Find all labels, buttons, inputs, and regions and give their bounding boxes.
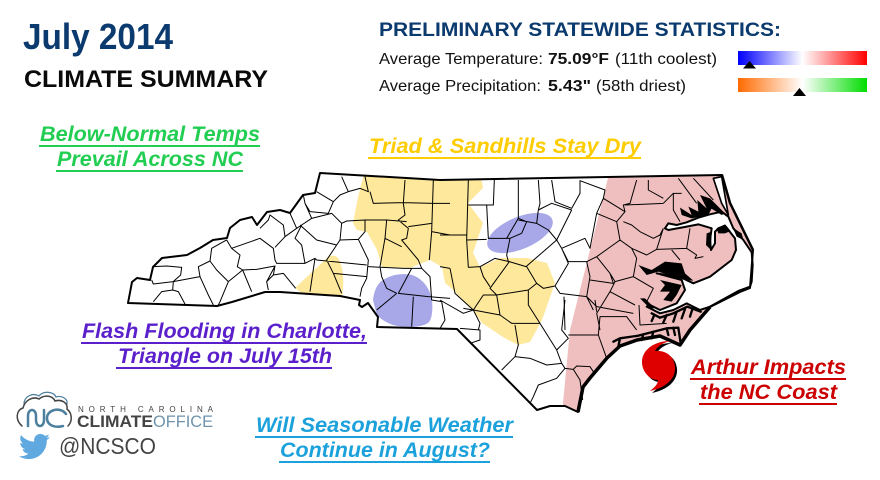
callout: below-normal temps: Prevail Across NC [57,148,244,171]
callout: seasonable weather: Will Seasonable Weather [256,414,515,437]
yellow dry area: Triad and Sandhills [353,170,555,345]
logo: North Carolina Climate Office [17,392,214,431]
stats heading: PRELIMINARY STATEWIDE STATISTICS: [379,20,781,41]
callout: Arthur [690,356,846,405]
precipitation statistic: Average Precipitation: [379,78,541,95]
precipitation statistic [379,78,686,95]
map: North Carolina counties [128,165,770,425]
sounds and inlets [613,177,753,347]
temperature rank bar [738,51,867,68]
temperature statistic: (11th coolest) [615,51,717,68]
panel: preliminary statewide statistics [379,20,867,96]
blue flash flood area: Triangle [487,212,553,254]
icon: hurricane Arthur [642,341,677,393]
Currituck sound water [713,177,728,215]
text: Twitter handle: @NCSCO [59,433,156,459]
region: below-normal temperature and dry shading [296,176,752,410]
subtitle: Climate Summary: CLIMATE SUMMARY [24,66,268,93]
text: Office: OFFICE [153,412,213,431]
callout: Arthur: Arthur Impacts [690,356,846,379]
precipitation statistic: (58th driest) [596,78,686,95]
county lines: central and east [440,178,713,330]
callout: Arthur: the NC Coast [700,381,838,404]
temperature statistic [379,51,717,68]
state outline [128,173,753,412]
precipitation rank bar [738,78,867,96]
callout: flash flooding [81,320,367,369]
yellow dry area: southern Piedmont [295,256,343,297]
pink coastal area [563,176,752,410]
callout: flash flooding: Flash Flooding in Charlotte, [82,320,367,343]
title: July 2014: July 2014 [23,16,173,57]
callout: below-normal temps: Below-Normal Temps [40,123,260,146]
icon: cloud [17,392,71,427]
county lines: southeast [460,300,637,403]
marsh teeth along Neuse and the south coast [613,307,701,347]
jagged marsh shoreline [638,195,743,308]
callout: flash flooding: Triangle on July 15th [118,345,332,368]
callout: Triad and Sandhills: Triad & Sandhills Stay Dry [369,135,642,158]
temperature statistic: 75.09°F [548,51,609,68]
callout: seasonable weather [255,414,515,463]
Albemarle and Pamlico sound water [647,212,753,313]
text: North Carolina: NORTH CAROLINA [78,405,214,414]
blue flash flood area: Charlotte [373,274,432,327]
icon: Twitter bird [19,434,50,459]
thick Outer Banks [722,175,753,250]
thick south coast [578,307,710,412]
text: Climate: CLIMATE [77,412,153,431]
callout: below-normal temps [39,123,260,172]
county lines: west [152,177,450,328]
temperature statistic: Average Temperature: [379,51,543,68]
callout: seasonable weather: Continue in August? [280,439,490,462]
precipitation statistic: 5.43" [548,78,591,95]
